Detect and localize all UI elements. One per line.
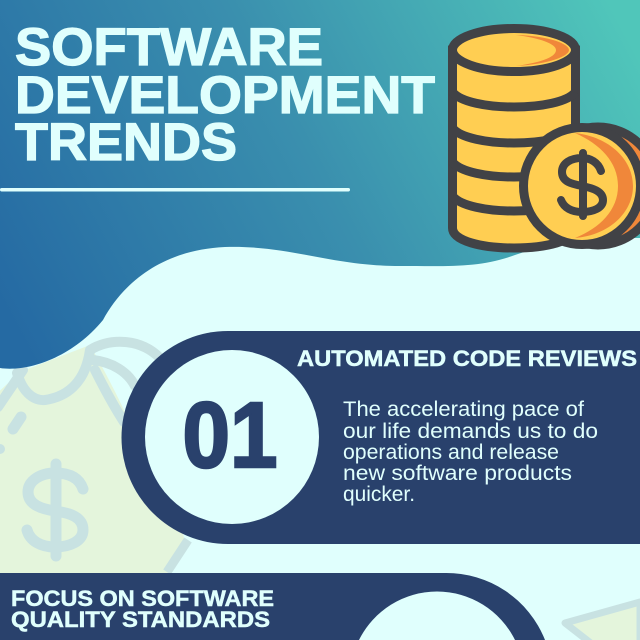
panel heading [11,586,274,632]
watermark dollar sign [27,464,83,556]
title underline [0,188,350,192]
panel body text: new software products [343,462,572,485]
coin dollar sign [561,153,603,216]
title: TRENDS [15,113,237,172]
panel band [122,331,640,544]
panel body text: quicker. [343,483,415,506]
number: 01 [182,383,278,487]
title: DEVELOPMENT [15,66,435,125]
icon: stack of gold coins [452,28,640,248]
panel body text [343,398,598,506]
front coin [524,128,640,244]
panel body text: operations and release [343,441,559,464]
panel: focus on software quality standards [0,573,545,640]
back coin edge [539,127,640,245]
panel heading: QUALITY STANDARDS [11,607,270,632]
title: SOFTWARE [15,18,323,77]
title [15,18,435,172]
header gradient with wave edge [0,0,640,369]
coin stack body [452,50,576,248]
decorative money bag watermark [0,342,188,573]
number circle [359,592,515,640]
panel heading: AUTOMATED CODE REVIEWS [297,346,637,371]
decorative envelope watermark [565,602,640,640]
panel body text: our life demands us to do [343,420,598,443]
panel band [0,573,545,640]
number circle [145,350,319,524]
panel body text: The accelerating pace of [343,398,584,421]
panel heading: FOCUS ON SOFTWARE [11,586,274,611]
panel: automated code reviews [122,331,640,544]
